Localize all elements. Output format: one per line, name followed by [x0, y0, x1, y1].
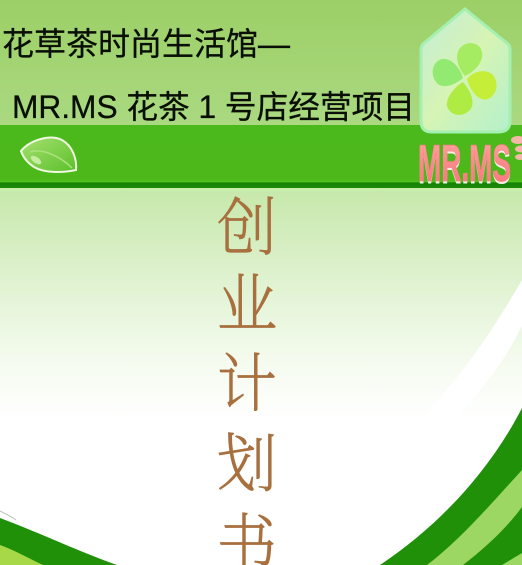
- vertical title: 划: [217, 430, 277, 500]
- icon: leaf: [21, 138, 76, 172]
- logo: clover house: [421, 9, 510, 132]
- vertical title: [217, 194, 277, 565]
- lower page gradient background: [0, 188, 522, 420]
- icon: clover leaves: [433, 43, 497, 115]
- icon: pink petals: [511, 136, 522, 160]
- vertical title: 创: [217, 194, 277, 264]
- title line 1: 花草茶时尚生活馆—: [2, 26, 290, 62]
- bottom-right green waves: [380, 408, 522, 565]
- green ribbon band: [0, 125, 522, 188]
- bottom-left green waves: [0, 511, 117, 565]
- top header background: [0, 0, 522, 125]
- vertical title: 计: [217, 350, 277, 420]
- title line 2: MR.MS 花茶 1 号店经营项目: [12, 89, 415, 125]
- vertical title: 业: [217, 270, 277, 340]
- white curved swoosh: [420, 280, 522, 420]
